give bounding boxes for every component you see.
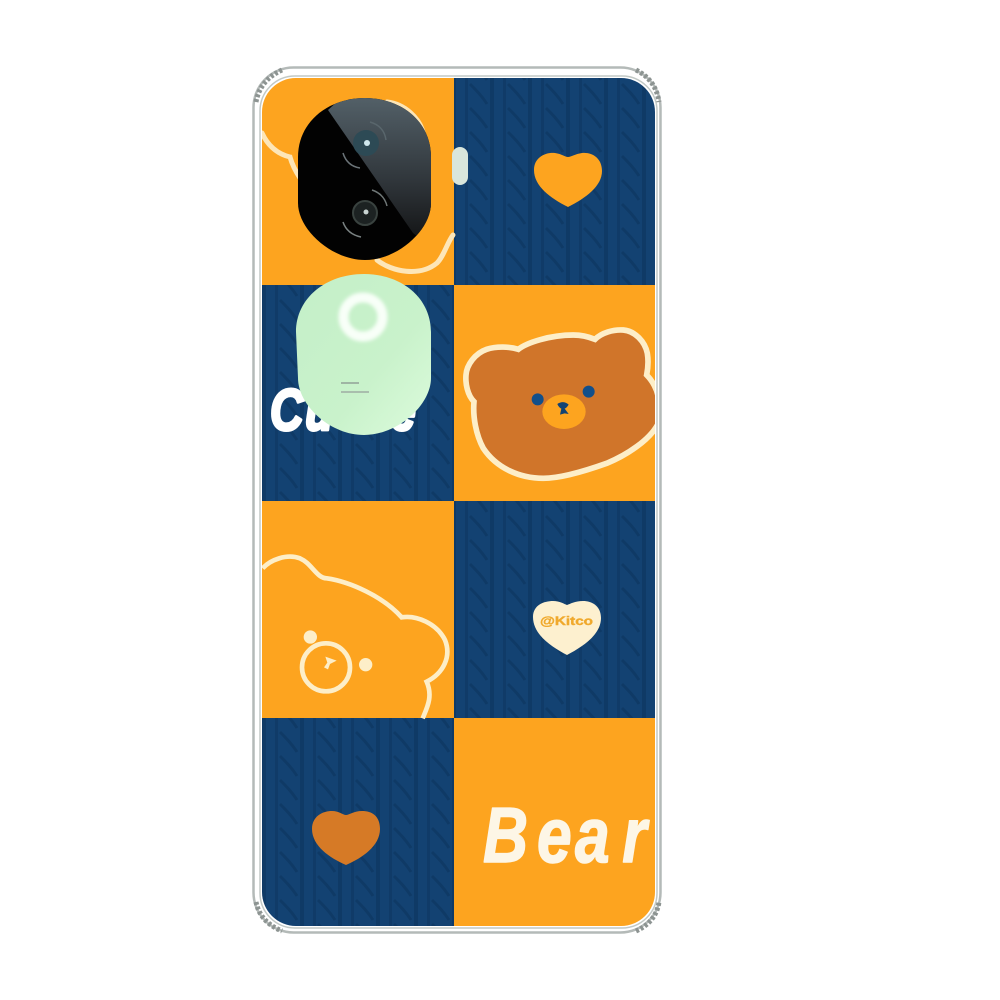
phone case frame — [254, 68, 660, 932]
mint green pill cutout — [296, 274, 431, 435]
heart: cream with Kitco tag: @Kitco — [540, 614, 593, 628]
camera module — [298, 98, 431, 260]
glass reflection — [328, 98, 431, 236]
tile: row 4 right orange — [454, 718, 655, 926]
tile: row 4 left navy knit — [262, 718, 454, 926]
bear face illustration — [466, 330, 658, 478]
heart: orange top right — [534, 153, 602, 207]
lens: lower — [343, 190, 387, 237]
tile: row 1 right navy knit — [454, 78, 655, 285]
heart: cream with Kitco tag — [533, 601, 601, 655]
bear outline peeking behind camera — [262, 102, 453, 271]
tile: row 3 right navy knit — [454, 501, 655, 718]
tile: row 3 left orange — [262, 501, 454, 718]
lens: upper — [343, 122, 386, 168]
heart: brown bottom left — [312, 811, 380, 865]
flash — [452, 147, 468, 185]
text: Cute: Cute — [270, 378, 416, 443]
text: Bear: Bear — [483, 791, 650, 879]
tile: row 2 left navy knit — [262, 285, 454, 501]
large bear outline — [263, 557, 447, 718]
tile: row 2 right orange — [454, 285, 655, 501]
checkerboard back panel — [262, 78, 658, 926]
tile: row 1 left orange — [262, 78, 454, 285]
